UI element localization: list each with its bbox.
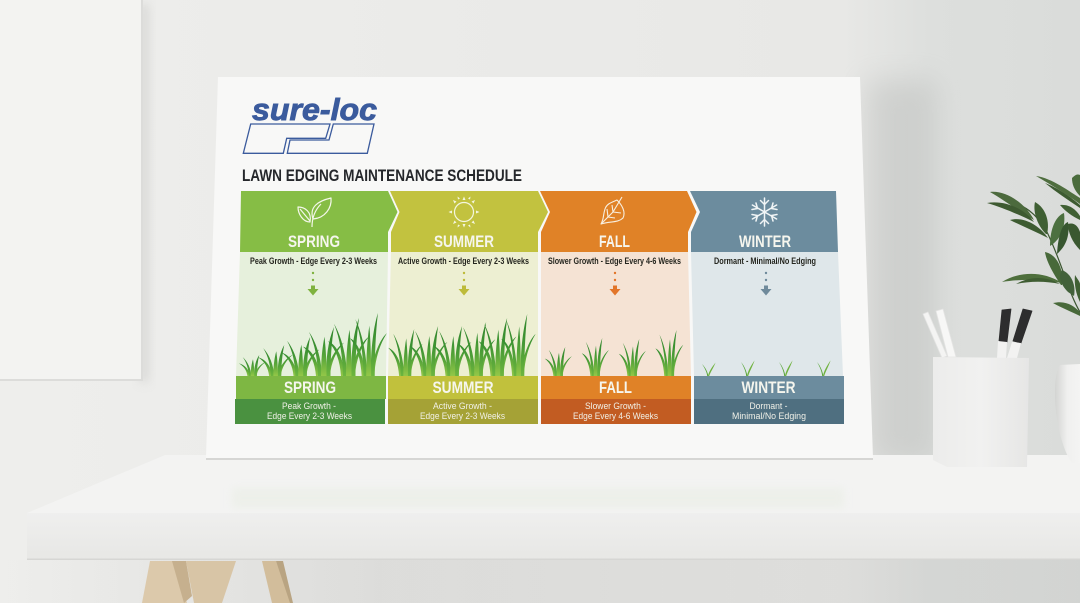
winter band note [694, 399, 844, 424]
fall band note [541, 399, 691, 424]
spring band note [235, 399, 385, 424]
summer band note [388, 399, 538, 424]
title: LAWN EDGING MAINTENANCE SCHEDULE [242, 167, 522, 185]
arrow: winter [760, 272, 772, 296]
spring band heading: SPRING [284, 379, 336, 397]
summer band note: Edge Every 2-3 Weeks [420, 411, 505, 422]
spring body [236, 252, 388, 376]
panel: winter [690, 191, 844, 424]
winter band note: Minimal/No Edging [732, 411, 806, 422]
summer header [390, 191, 548, 252]
summer band [388, 376, 538, 399]
summer body [388, 252, 538, 376]
grass: summer [388, 314, 536, 376]
summer heading: SUMMER [434, 233, 494, 251]
winter body [691, 252, 843, 376]
winter heading: WINTER [739, 233, 791, 251]
fall band note: Edge Every 4-6 Weeks [573, 411, 658, 422]
pen cup [933, 357, 1029, 467]
arrow: fall [610, 272, 620, 296]
panel: summer [388, 191, 548, 424]
arrow: summer [458, 272, 470, 296]
wall frame [0, 0, 148, 382]
icon: sprout [298, 198, 331, 227]
desk legs [142, 561, 293, 603]
fall heading: FALL [599, 233, 630, 251]
pens and markers [923, 309, 1032, 358]
summer band heading: SUMMER [432, 379, 494, 397]
icon: fall leaf [601, 197, 624, 224]
desk [0, 455, 1080, 603]
winter header [690, 191, 838, 252]
winter band note: Dormant - [750, 401, 788, 412]
fall band [541, 376, 691, 399]
white plant pot [1055, 364, 1080, 463]
logo: sure-loc: sure-loc [252, 92, 377, 127]
fall band note: Slower Growth - [585, 401, 646, 412]
summer note: Active Growth - Edge Every 2-3 Weeks [398, 256, 529, 267]
spring header [240, 191, 398, 252]
summer band note: Active Growth - [433, 401, 492, 412]
panel: spring [235, 191, 398, 424]
winter band heading: WINTER [742, 379, 796, 397]
spring note: Peak Growth - Edge Every 2-3 Weeks [250, 256, 377, 267]
grass: fall [545, 330, 683, 376]
panel: fall [540, 191, 696, 424]
fall header [540, 191, 696, 252]
fall band heading: FALL [599, 379, 632, 397]
fall body [541, 252, 691, 376]
fall note: Slower Growth - Edge Every 4-6 Weeks [548, 256, 681, 267]
plant [987, 174, 1080, 316]
winter note: Dormant - Minimal/No Edging [714, 256, 816, 267]
spring band note: Edge Every 2-3 Weeks [267, 411, 352, 422]
arrow: spring [308, 272, 318, 296]
spring heading: SPRING [288, 233, 340, 251]
winter band [694, 376, 844, 399]
grass: winter [702, 360, 831, 376]
logo: sure-loc [243, 92, 377, 153]
grass: spring [239, 313, 387, 376]
spring band [236, 376, 386, 399]
icon: snowflake [752, 198, 777, 226]
poster board [206, 77, 873, 460]
spring band note: Peak Growth - [282, 401, 336, 412]
icon: sun [448, 196, 480, 228]
